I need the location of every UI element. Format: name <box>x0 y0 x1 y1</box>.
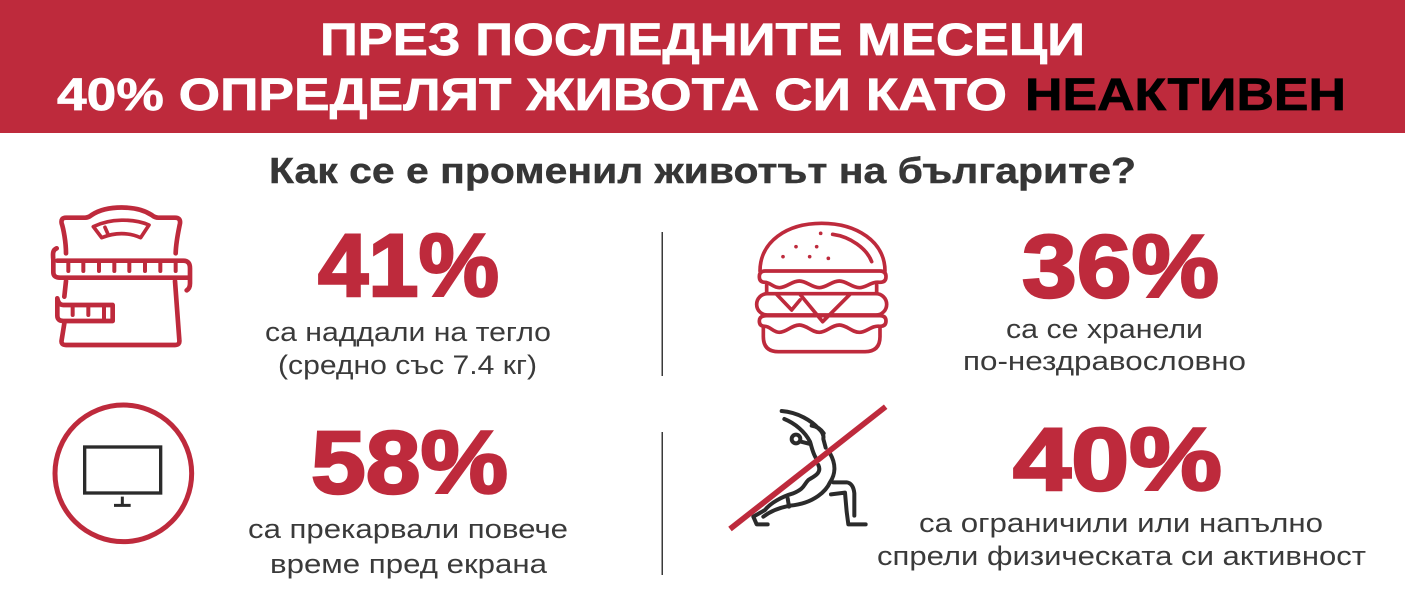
caption: screen time: са прекарвали повече <box>248 514 568 544</box>
caption: screen time <box>248 514 568 579</box>
icon: burger <box>757 223 887 352</box>
panel: screen time <box>55 405 568 579</box>
headline line 1: ПРЕЗ ПОСЛЕДНИТЕ МЕСЕЦИ <box>320 14 1085 65</box>
caption: unhealthy eating: по-нездравословно <box>963 346 1246 376</box>
stat: 40%: 40% <box>1013 409 1222 509</box>
panel: reduced activity <box>730 407 1366 571</box>
icon: scale with measuring tape <box>53 207 190 345</box>
headline emphasis: НЕАКТИВЕН <box>1025 69 1346 120</box>
caption: reduced activity: са ограничили или напълно <box>919 508 1323 538</box>
caption: reduced activity: спрели физическата си активност <box>877 541 1366 571</box>
caption: weight gain: са наддали на тегло <box>265 317 551 347</box>
icon: crossed-out yoga figure <box>730 407 886 529</box>
icon: monitor in circle <box>55 405 192 542</box>
subtitle: Как се е променил животът на българите? <box>269 150 1136 191</box>
headline line 2: 40% ОПРЕДЕЛЯТ ЖИВОТА СИ КАТО <box>57 69 1007 120</box>
stat: 36%: 36% <box>1022 216 1219 316</box>
stat: 58%: 58% <box>311 412 508 512</box>
caption: screen time: време пред екрана <box>270 549 548 579</box>
caption: weight gain: (средно със 7.4 кг) <box>278 350 537 380</box>
panel: unhealthy eating <box>757 216 1246 376</box>
caption: unhealthy eating: са се хранели <box>1006 314 1203 344</box>
header banner <box>0 0 1405 133</box>
stat: 41%: 41% <box>318 215 499 315</box>
panel: weight gain <box>53 207 551 380</box>
caption: reduced activity <box>877 508 1366 571</box>
caption: weight gain <box>265 317 551 380</box>
caption: unhealthy eating <box>963 314 1246 376</box>
